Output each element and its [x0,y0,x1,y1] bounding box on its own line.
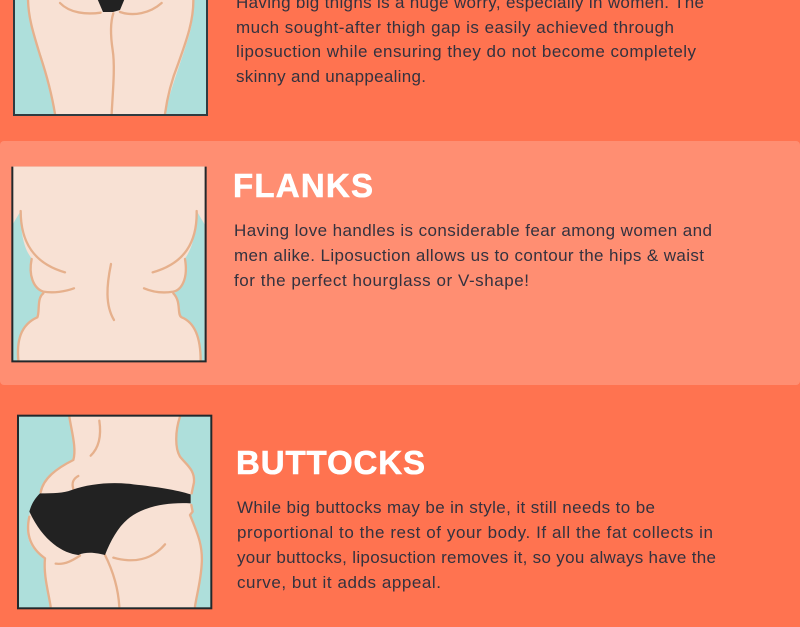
illustration: thighs [14,0,207,115]
body text: flanks: for the perfect hourglass or V-shape! [234,271,529,290]
heading: buttocks: BUTTOCKS [236,444,425,481]
body text: thighs [236,0,704,86]
panel background [0,141,800,385]
body text: buttocks [237,498,716,592]
body text: thighs: liposuction while ensuring they do not become completely [236,42,696,61]
body text: flanks: men alike. Liposuction allows us to contour the hips & waist [234,246,704,265]
heading: flanks: FLANKS [233,167,373,204]
body text: buttocks: proportional to the rest of your body. If all the fat collects in [237,523,713,542]
body text: flanks: Having love handles is considerable fear among women and [234,221,712,240]
bikini [29,483,191,555]
illustration: flanks [12,167,206,361]
body text: buttocks: curve, but it adds appeal. [237,573,441,592]
body text: buttocks: While big buttocks may be in style, it still needs to be [237,498,655,517]
panel: thighs [14,0,704,115]
panel: flanks [0,141,800,385]
panel: buttocks [18,416,716,608]
illustration: buttocks [18,416,211,608]
body text: buttocks: your buttocks, liposuction removes it, so you always have the [237,548,716,567]
body text: thighs: skinny and unappealing. [236,67,426,86]
body text: thighs: much sought-after thigh gap is easily achieved through [236,18,674,37]
body text: flanks [234,221,712,290]
